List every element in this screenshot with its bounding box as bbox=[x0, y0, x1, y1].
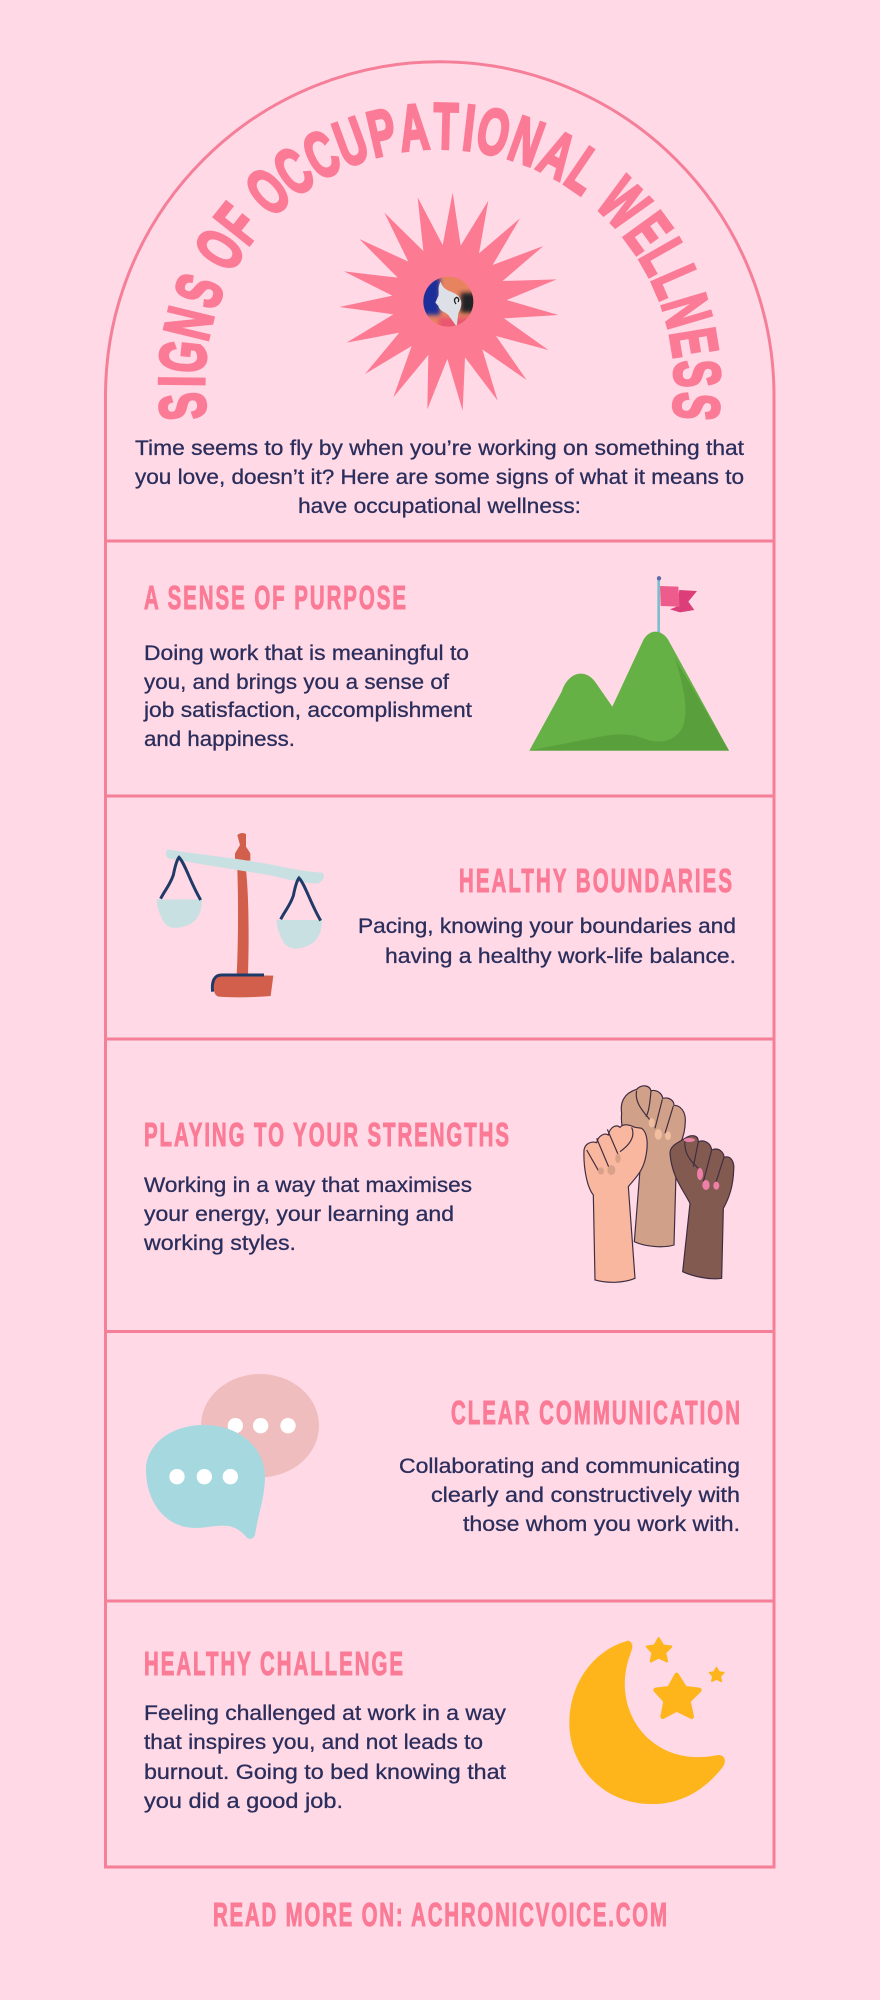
title: curved heading: U bbox=[325, 104, 377, 181]
body text: Working in a way that maximises bbox=[144, 1174, 472, 1197]
body text: Doing work that is meaningful to bbox=[144, 642, 469, 665]
panel: playing to your strengths bbox=[143, 1086, 734, 1282]
heading: A SENSE OF PURPOSE bbox=[144, 579, 406, 616]
body text: Feeling challenged at work in a way bbox=[144, 1702, 507, 1725]
icon: three raised fists bbox=[584, 1086, 734, 1282]
title: curved heading: E bbox=[610, 201, 685, 265]
title: curved heading: P bbox=[361, 95, 403, 172]
title: curved heading bbox=[146, 91, 733, 423]
title: curved heading: E bbox=[655, 323, 731, 362]
icon: starburst bbox=[339, 193, 558, 411]
title: curved heading: N bbox=[151, 301, 228, 346]
heading: HEALTHY BOUNDARIES bbox=[459, 862, 732, 899]
body text: that inspires you, and not leads to bbox=[144, 1731, 483, 1754]
title: curved heading: O bbox=[233, 155, 304, 229]
icon: mountain with flag bbox=[529, 576, 729, 751]
infographic canvas bbox=[104, 60, 776, 1927]
title: curved heading: A bbox=[528, 117, 587, 194]
title: curved heading: N bbox=[647, 287, 725, 335]
title: curved heading: O bbox=[181, 217, 259, 282]
body text: and happiness. bbox=[144, 728, 295, 751]
footer link: READ MORE ON: ACHRONICVOICE.COM bbox=[213, 1896, 667, 1933]
panel: clear communication bbox=[146, 1374, 740, 1539]
title: curved heading: L bbox=[638, 256, 713, 307]
heading: HEALTHY CHALLENGE bbox=[144, 1645, 403, 1682]
title: curved heading: F bbox=[202, 192, 274, 256]
body text bbox=[399, 1455, 740, 1536]
title: curved heading: L bbox=[626, 228, 701, 286]
body text: clearly and constructively with bbox=[431, 1484, 740, 1507]
body text: Collaborating and communicating bbox=[399, 1455, 740, 1478]
panel: healthy boundaries bbox=[157, 833, 736, 997]
body text: you did a good job. bbox=[144, 1790, 343, 1813]
title: curved heading: I bbox=[459, 92, 479, 165]
icon: moon and stars bbox=[569, 1638, 725, 1804]
intro text: you love, doesn’t it? Here are some signs of what it means to bbox=[135, 466, 744, 489]
title: curved heading: S bbox=[161, 265, 238, 317]
title: curved heading: T bbox=[433, 91, 459, 163]
panel: healthy challenge bbox=[144, 1638, 725, 1813]
title: curved heading: S bbox=[659, 390, 733, 423]
body text: job satisfaction, accomplishment bbox=[143, 699, 472, 722]
body text bbox=[358, 915, 736, 968]
intro text: have occupational wellness: bbox=[298, 495, 581, 518]
panel: a sense of purpose bbox=[143, 576, 729, 751]
arch frame with section rows bbox=[106, 62, 774, 1867]
heading: PLAYING TO YOUR STRENGTHS bbox=[144, 1116, 509, 1153]
intro text: Time seems to fly by when you’re working on something that bbox=[135, 437, 744, 460]
title: curved heading: N bbox=[500, 103, 552, 181]
title: curved heading: I bbox=[146, 375, 218, 387]
title: curved heading: O bbox=[471, 94, 516, 171]
title: curved heading: S bbox=[146, 390, 220, 423]
body text: you, and brings you a sense of bbox=[144, 671, 449, 694]
heading: CLEAR COMMUNICATION bbox=[451, 1394, 740, 1431]
body text bbox=[144, 1702, 507, 1813]
title: curved heading: S bbox=[660, 359, 733, 389]
body text bbox=[143, 642, 472, 751]
title: curved heading: L bbox=[554, 135, 614, 208]
body text: having a healthy work-life balance. bbox=[385, 945, 736, 968]
intro text bbox=[135, 437, 744, 518]
icon: balance scales bbox=[157, 833, 324, 997]
body text: burnout. Going to bed knowing that bbox=[144, 1761, 506, 1784]
title: curved heading: C bbox=[292, 117, 351, 194]
body text: working styles. bbox=[143, 1232, 296, 1255]
icon: speech bubbles bbox=[146, 1374, 319, 1539]
title: curved heading: W bbox=[584, 165, 662, 243]
body text: your energy, your learning and bbox=[144, 1203, 454, 1226]
body text: Pacing, knowing your boundaries and bbox=[358, 915, 736, 938]
body text bbox=[143, 1174, 472, 1255]
title: curved heading: C bbox=[261, 134, 326, 210]
title: curved heading: G bbox=[146, 337, 221, 376]
body text: those whom you work with. bbox=[463, 1513, 740, 1536]
icon: logo profile bbox=[423, 276, 474, 327]
title: curved heading: A bbox=[396, 91, 432, 165]
